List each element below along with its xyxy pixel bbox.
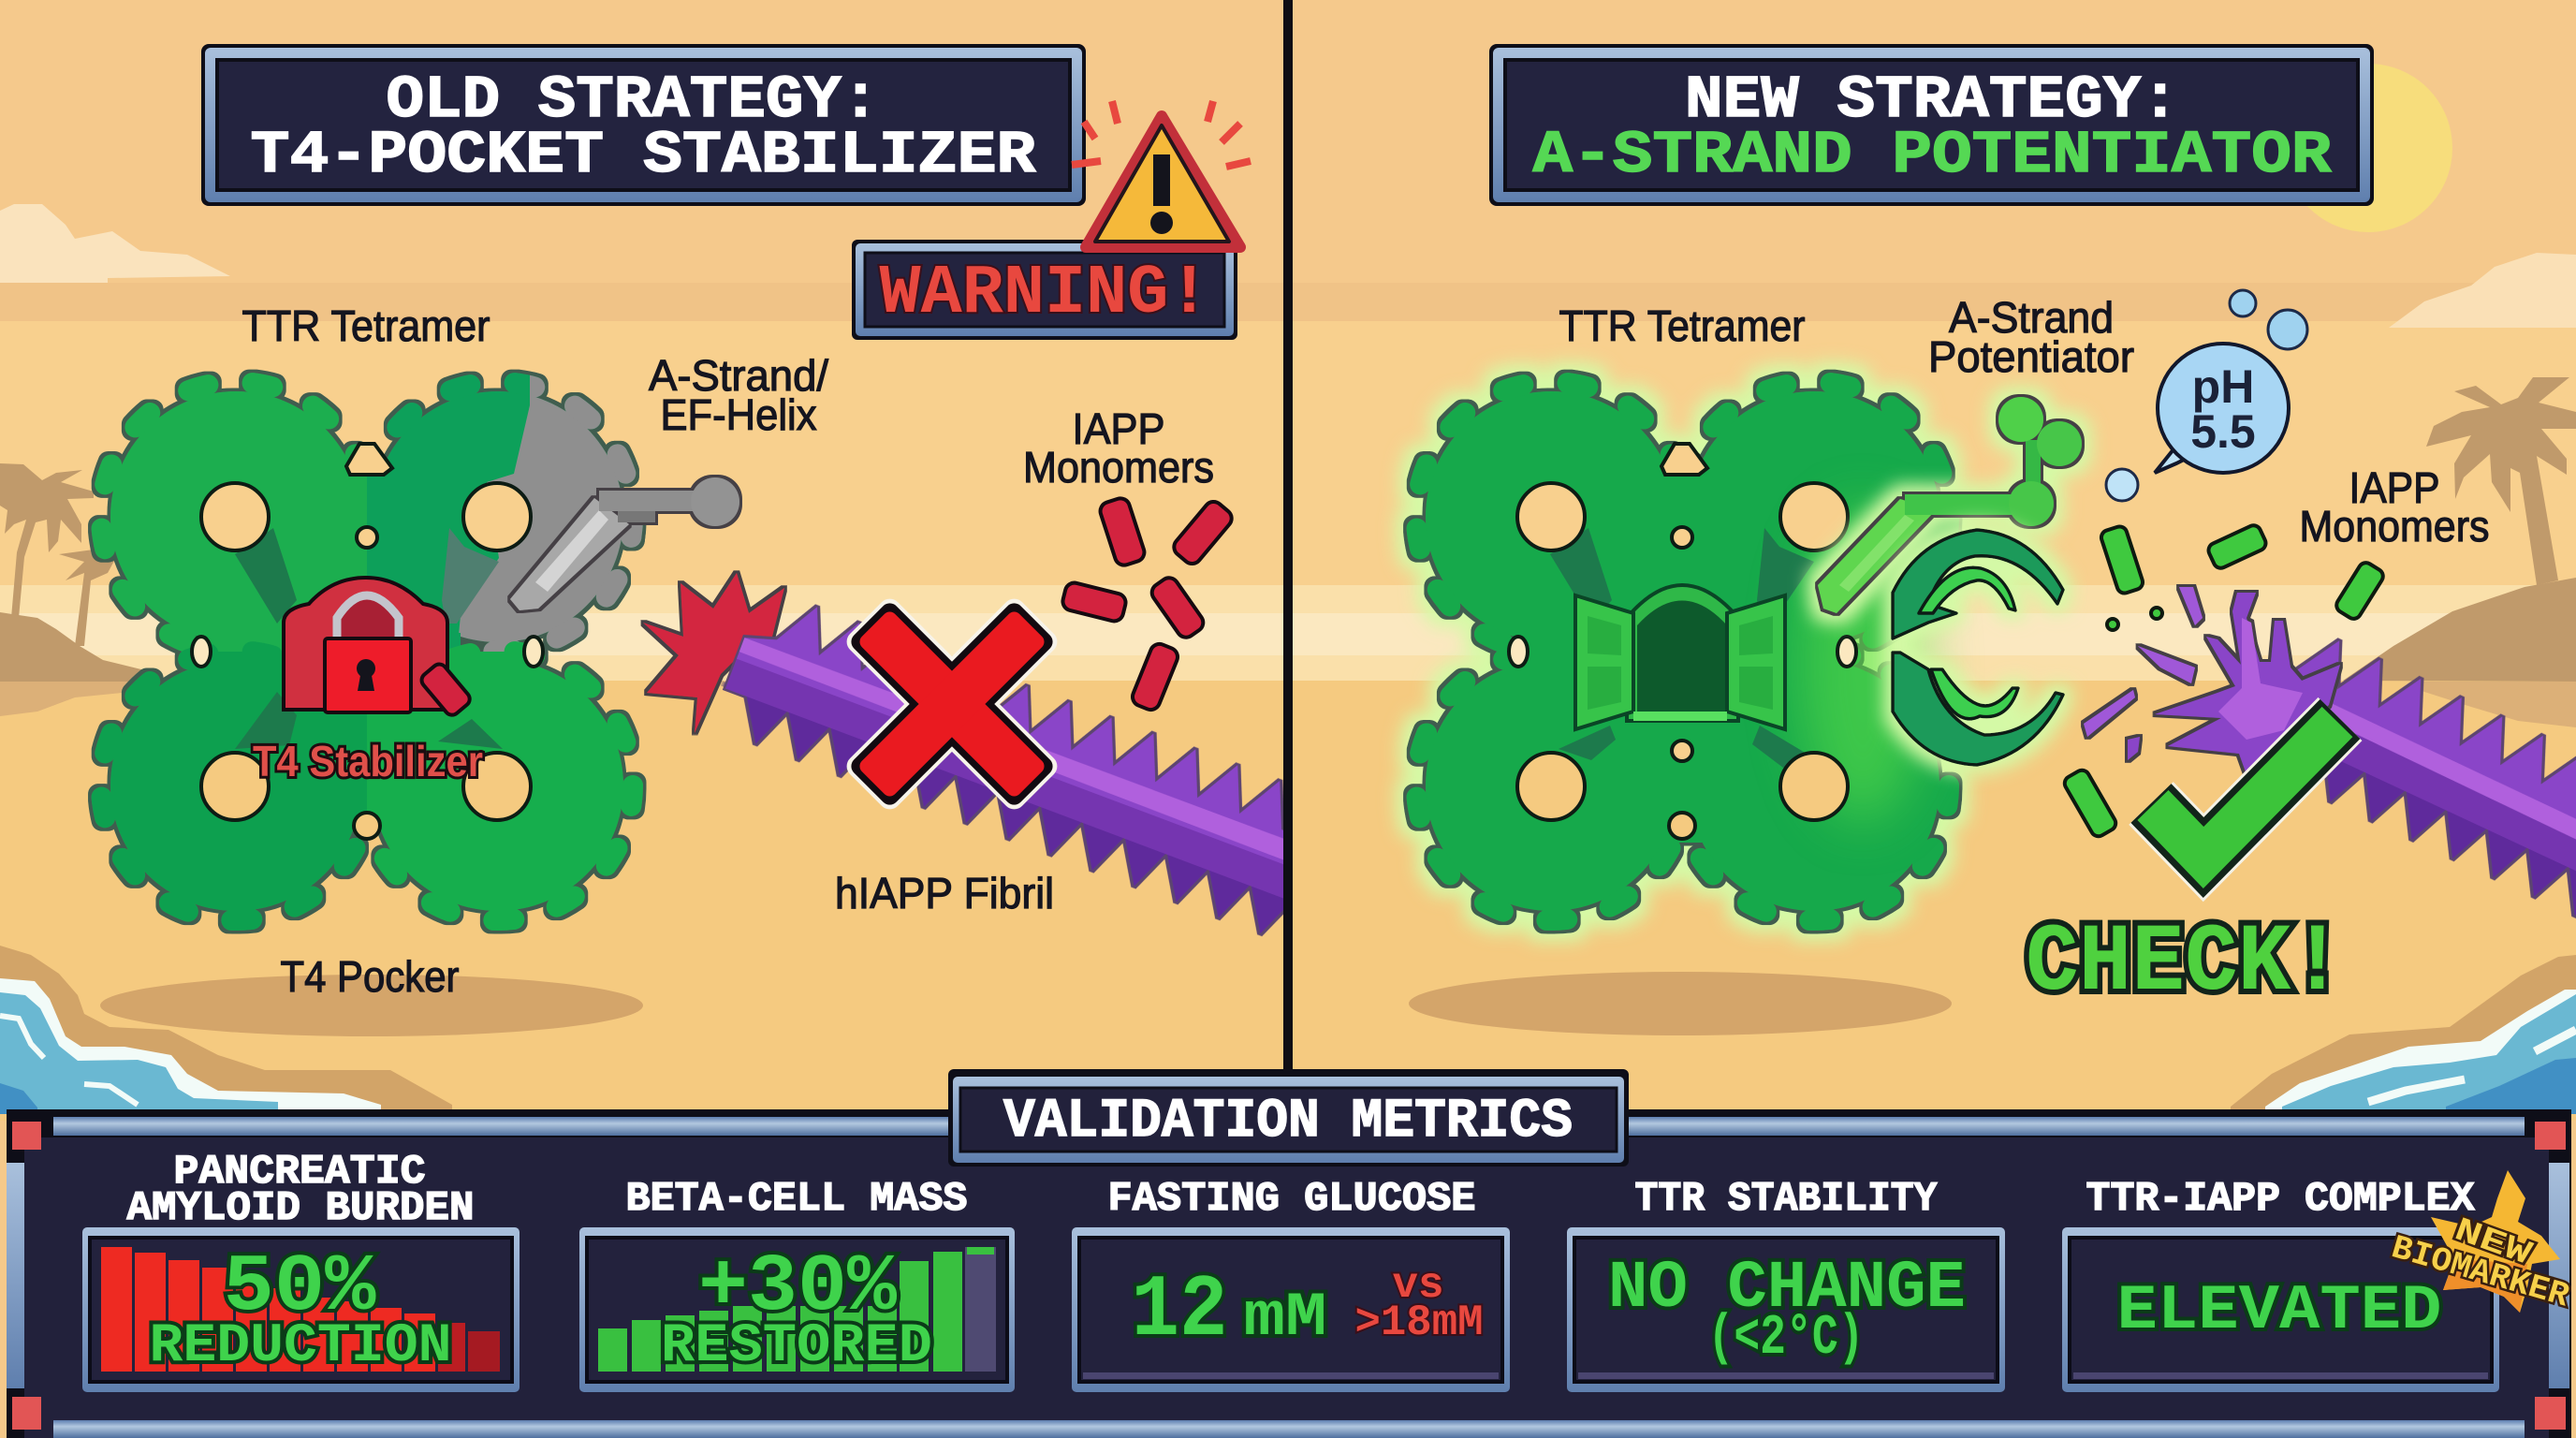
green monomers: [2062, 523, 2386, 839]
metric: fasting glucose: [1072, 1176, 1510, 1392]
metric: fasting glucose: vs: [1393, 1261, 1443, 1310]
shadow under right gears: [1409, 972, 1952, 1035]
metric: TTR-IAPP complex: TTR-IAPP COMPLEX: [2086, 1176, 2475, 1223]
labels right: Monomers: [2299, 502, 2490, 550]
panel: validation metrics: [7, 1109, 2571, 1438]
metric: TTR stability: (<2°C): [1707, 1307, 1865, 1371]
labels left: A-Strand/: [649, 351, 828, 400]
bubble: pH 5.5: 5.5: [2190, 405, 2256, 458]
green potentiator rod: [1818, 397, 2082, 613]
metric: beta-cell mass: RESTORED: [661, 1316, 932, 1377]
claw arcs: [1893, 530, 2063, 765]
title: new strategy: [1489, 44, 2374, 206]
badge: new biomarker: NEW: [2450, 1211, 2537, 1274]
badge: new biomarker: [2387, 1170, 2573, 1316]
palms and hill left: [0, 463, 153, 716]
fibril right: [2295, 637, 2576, 919]
shore left: [0, 946, 452, 1114]
metric: TTR stability: NO CHANGE: [1608, 1252, 1966, 1327]
title: new strategy: NEW STRATEGY:: [1685, 67, 2179, 135]
labels left: hIAPP Fibril: [835, 869, 1054, 917]
divider: [1283, 0, 1293, 1114]
warning label: WARNING!: [880, 255, 1209, 333]
labels left: T4 Stabilizer: [253, 737, 483, 785]
metric: pancreatic amyloid burden: PANCREATIC: [174, 1149, 425, 1196]
red X: [780, 532, 1124, 876]
labels left: [242, 301, 1214, 1001]
metric: pancreatic amyloid burden: REDUCTION: [150, 1316, 452, 1377]
metric: TTR stability: [1567, 1176, 2005, 1392]
labels right: TTR Tetramer: [1559, 301, 1805, 350]
metric: beta-cell mass: [579, 1176, 1015, 1392]
metric: pancreatic amyloid burden: 50%: [223, 1241, 376, 1333]
purple splash: [2084, 587, 2340, 780]
shore right: [2231, 955, 2576, 1114]
metric: TTR stability: TTR STABILITY: [1634, 1176, 1938, 1223]
panel: new strategy: [1409, 290, 2576, 1035]
badge: new biomarker: BIOMARKER: [2387, 1228, 2573, 1316]
title: old strategy: [201, 44, 1086, 206]
gears: TTR tetramer right: [1416, 382, 1949, 920]
labels left: TTR Tetramer: [242, 301, 490, 350]
lock: T4 stabilizer: [284, 578, 473, 718]
palm and hill right: [2343, 377, 2576, 727]
gears: TTR tetramer left: [101, 382, 633, 920]
red monomers: [1061, 496, 1236, 712]
shadow under left gears: [100, 975, 643, 1036]
title: validation metrics tab: VALIDATION METRICS: [1003, 1092, 1573, 1152]
labels left: Monomers: [1023, 443, 1214, 492]
cloud right: [2389, 253, 2576, 328]
fibril left: [720, 604, 1283, 936]
check text: CHECK!: [2026, 909, 2344, 1018]
metric: fasting glucose: mM: [1243, 1283, 1327, 1353]
metric: TTR-IAPP complex: [2062, 1176, 2499, 1392]
labels right: A-Strand: [1949, 293, 2114, 342]
labels right: [1559, 293, 2490, 550]
bubble: pH 5.5: pH: [2192, 360, 2254, 413]
metric: TTR-IAPP complex: ELEVATED: [2117, 1275, 2441, 1347]
gray A-strand rod: [510, 477, 739, 610]
labels right: IAPP: [2349, 463, 2439, 512]
warning label: [852, 240, 1237, 340]
labels right: Potentiator: [1928, 332, 2134, 381]
title: new strategy: A-STRAND POTENTIATOR: [1533, 123, 2332, 190]
labels left: T4 Pocker: [281, 952, 459, 1001]
metric: pancreatic amyloid burden: AMYLOID BURDEN: [127, 1185, 474, 1232]
panel: old strategy: [100, 301, 1372, 1036]
labels left: IAPP: [1073, 404, 1164, 453]
icon: check mark: [2151, 719, 2340, 858]
title: validation metrics tab: [948, 1069, 1629, 1167]
green energy glow: [1797, 506, 1928, 824]
metric: beta-cell mass: +30%: [698, 1241, 897, 1333]
icon: open door: [1575, 585, 1785, 729]
metric: fasting glucose: 12: [1131, 1262, 1228, 1361]
title: old strategy: T4-POCKET STABILIZER: [251, 123, 1036, 190]
bar chart: beta-cell restoration: [598, 1247, 996, 1372]
cloud left: [0, 204, 230, 283]
title: old strategy: OLD STRATEGY:: [386, 67, 880, 135]
bubble: pH 5.5: [2106, 290, 2307, 501]
bar chart: amyloid decline: [101, 1247, 500, 1372]
red fibril tip: [643, 573, 784, 733]
labels left: EF-Helix: [661, 390, 816, 439]
icon: warning triangle: [1072, 101, 1251, 247]
metric: beta-cell mass: BETA-CELL MASS: [625, 1176, 968, 1223]
metric: pancreatic amyloid burden: [82, 1149, 520, 1392]
metric: fasting glucose: FASTING GLUCOSE: [1108, 1176, 1475, 1223]
sun: [2284, 64, 2452, 232]
metric: fasting glucose: >18mM: [1355, 1299, 1483, 1347]
